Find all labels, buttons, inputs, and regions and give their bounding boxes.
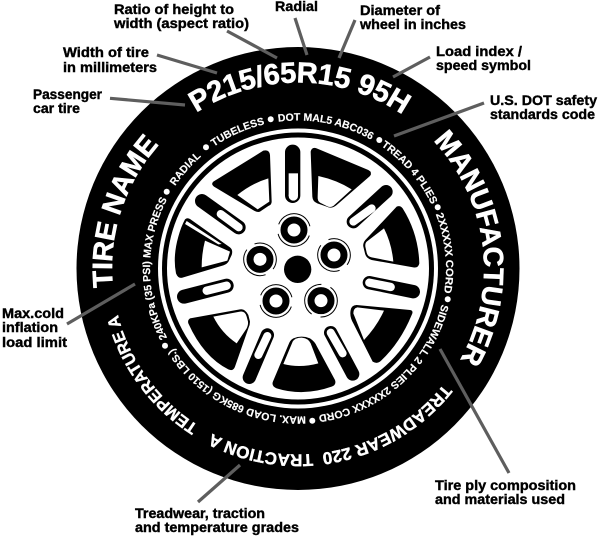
callout: aspect ratio bbox=[113, 1, 277, 58]
callout: passenger car: Passenger bbox=[33, 86, 103, 102]
tire bbox=[76, 47, 520, 490]
callout: ply composition: and materials used bbox=[435, 491, 565, 507]
temperature grade: TEMPERATURE A bbox=[108, 314, 196, 436]
big windows bbox=[175, 148, 419, 392]
inner sidewall text ring: 240KPa (35 PSI) MAX PRESS bbox=[142, 197, 167, 340]
callout: load index bbox=[393, 43, 531, 77]
center hub bbox=[284, 256, 311, 283]
inner sidewall text ring: TUBELESS bbox=[210, 118, 264, 146]
callout: load index: speed symbol bbox=[436, 57, 531, 73]
bullets on the ring bbox=[162, 116, 451, 424]
wheel disc bbox=[167, 138, 429, 400]
callout: load index: Load index / bbox=[436, 43, 522, 59]
callout: max cold inflation: Max.cold bbox=[2, 305, 64, 321]
callout: passenger car: car tire bbox=[33, 100, 80, 116]
wheel spokes and lug nuts bbox=[175, 148, 419, 392]
inner sidewall text ring: DOT MAL5 ABC036 bbox=[278, 113, 374, 140]
treadwear grade: TREADWEAR 220 bbox=[323, 386, 453, 464]
inner sidewall text ring: TREAD 4 PLIES bbox=[383, 140, 438, 204]
callout: DOT code: U.S. DOT safety bbox=[490, 92, 597, 108]
callout: tire width bbox=[63, 44, 217, 75]
inner sidewall text ring: 2XXXXX CORD bbox=[436, 212, 454, 294]
tire size code: P215/65R15 95H bbox=[187, 62, 412, 114]
callout: ply composition: Tire ply composition bbox=[435, 477, 576, 493]
callout: max cold inflation: load limit bbox=[2, 334, 67, 350]
callout: tire width: Width of tire bbox=[63, 44, 149, 60]
callout: wheel diameter bbox=[339, 2, 466, 58]
callout: quality grades: Treadwear, traction bbox=[135, 505, 265, 521]
callout: max cold inflation bbox=[2, 284, 135, 350]
manufacturer: MANUFACTURER bbox=[434, 129, 504, 366]
lug nuts bbox=[239, 209, 355, 323]
callout: aspect ratio: width (aspect ratio) bbox=[113, 15, 249, 31]
callout: tire width: in millimeters bbox=[63, 59, 157, 75]
tire body bbox=[76, 47, 520, 490]
callout: max cold inflation: inflation bbox=[2, 319, 58, 335]
callout: wheel diameter: Diameter of bbox=[360, 2, 440, 18]
callout: DOT code: standards code bbox=[490, 106, 595, 122]
callout: radial bbox=[275, 0, 318, 55]
callout: aspect ratio: Ratio of height to bbox=[114, 1, 234, 17]
spoke slots bbox=[184, 152, 413, 377]
tire name: TIRE NAME bbox=[92, 133, 159, 288]
rim ring bbox=[158, 128, 438, 408]
callout: wheel diameter: wheel in inches bbox=[359, 16, 466, 32]
callout: quality grades: and temperature grades bbox=[135, 519, 299, 535]
callout: ply composition bbox=[435, 349, 576, 507]
inner sidewall text ring: MAX. LOAD 685KG (1510 LBS.) bbox=[168, 348, 306, 424]
callout: DOT code bbox=[394, 92, 597, 136]
traction grade: TRACTION A bbox=[210, 434, 314, 466]
callout: quality grades bbox=[135, 465, 299, 535]
inner sidewall text ring bbox=[142, 113, 454, 424]
callout: passenger car bbox=[33, 86, 185, 116]
inner sidewall text ring: RADIAL bbox=[169, 154, 202, 186]
inner sidewall text ring: SIDEWALL 2 PLIES 2XXXXX CORD bbox=[319, 304, 448, 422]
